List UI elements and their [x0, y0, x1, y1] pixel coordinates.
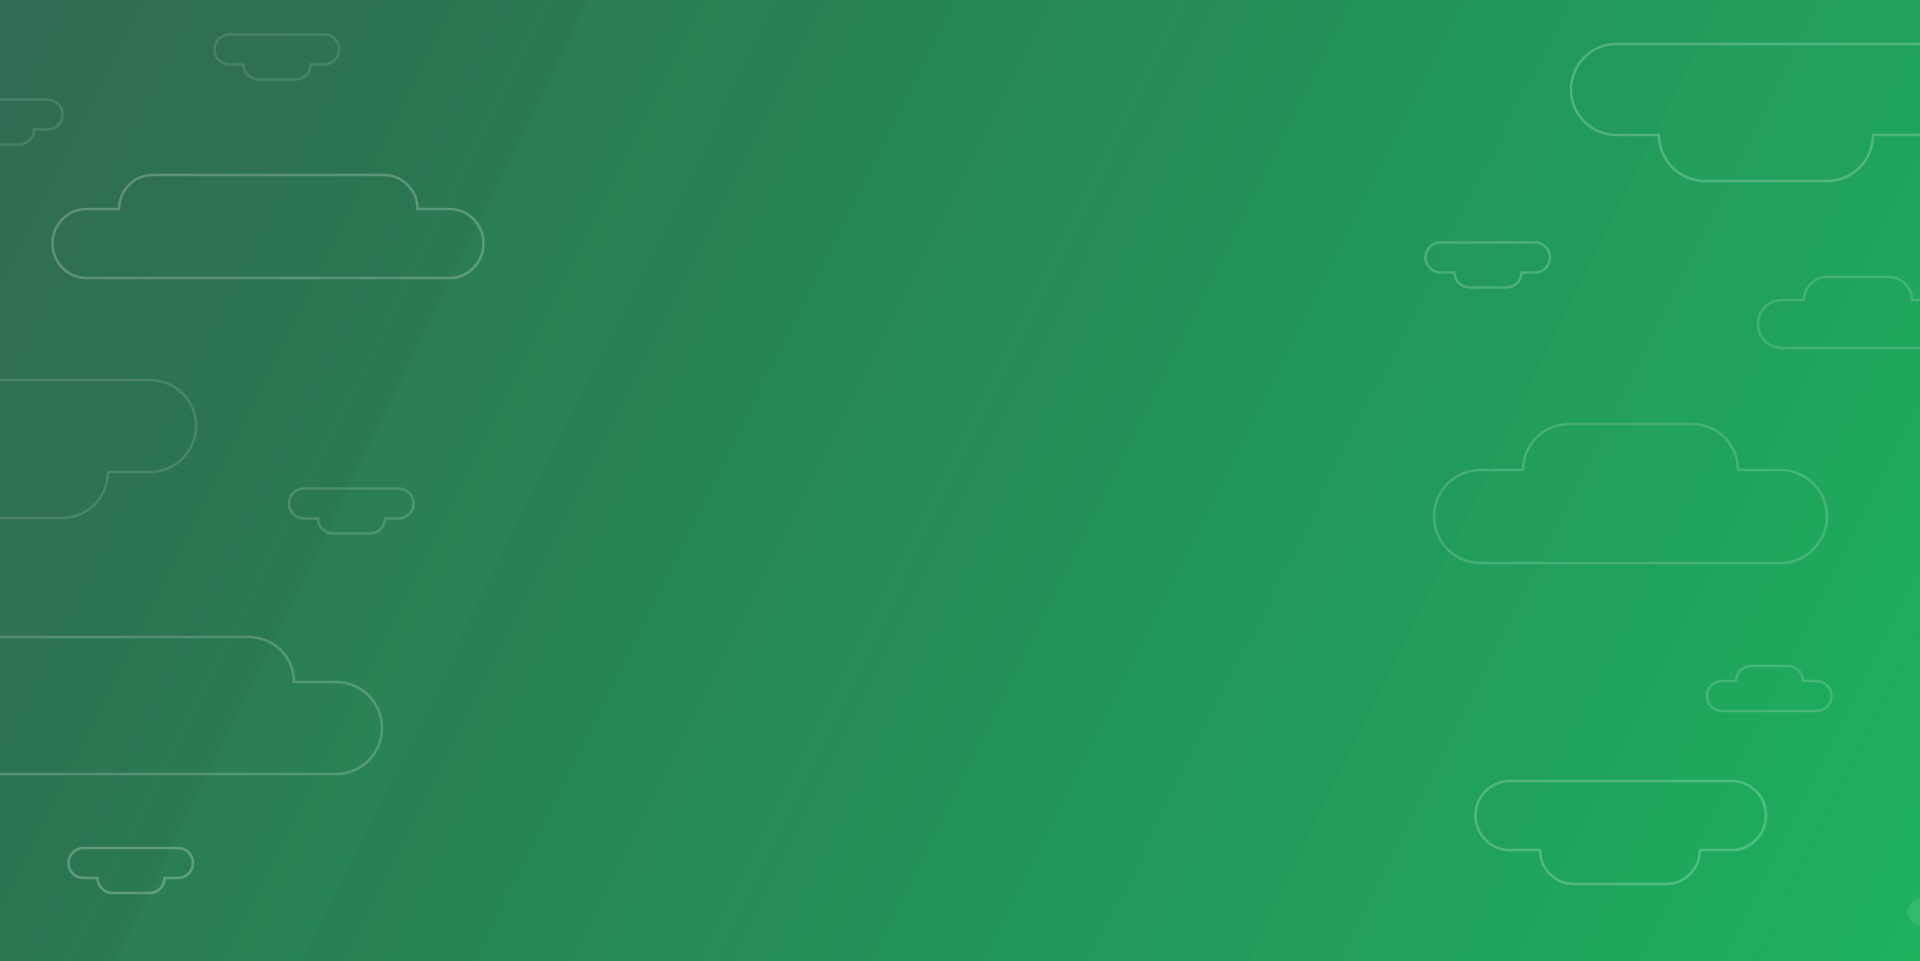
- cloud: small lower right: [1707, 666, 1832, 711]
- cloud: large clipped lower left: [0, 637, 382, 774]
- cloud: large clipped middle left: [0, 380, 196, 518]
- cloud: medium clipped at right edge: [1758, 277, 1920, 348]
- cloud: small clipped at left edge: [0, 100, 63, 144]
- cloud: large top right: [1571, 44, 1920, 181]
- cloud: small middle left: [289, 488, 414, 534]
- clouds on the right: [1426, 44, 1920, 884]
- cloud: large bottom right: [1476, 781, 1766, 884]
- cloud: small top left: [215, 34, 339, 80]
- cloud: large middle right: [1434, 424, 1827, 563]
- clouds on the left: [0, 34, 484, 893]
- cloud: small upper right: [1426, 242, 1550, 288]
- cloud: small bottom left: [69, 848, 193, 893]
- cloud: large upper left: [53, 175, 484, 278]
- small circle at right edge: [1908, 898, 1920, 926]
